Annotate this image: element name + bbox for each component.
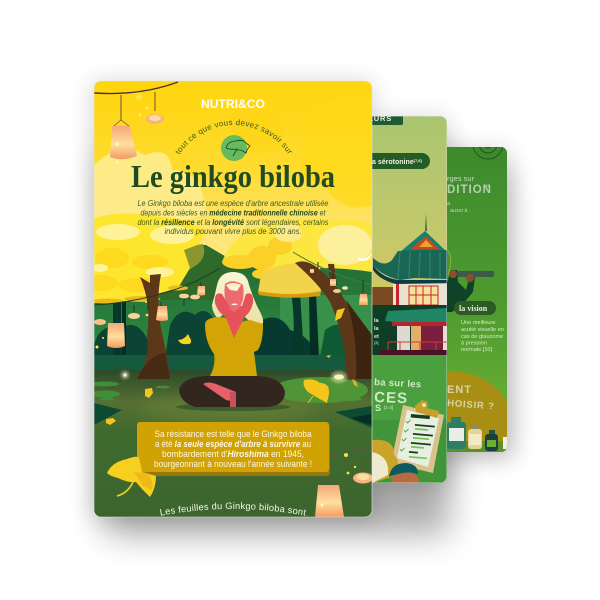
heading: charges sur l'audition: DITION [447,184,492,196]
hanging lamp string bottom right [330,447,372,455]
hands [215,293,229,318]
intro text [138,198,329,236]
pill: la sérotonine [372,153,430,169]
heading: biloba sur les: [1-3] [384,405,393,410]
heading: biloba sur les: S [375,403,381,413]
clipboard icon [391,400,444,473]
lower green section [372,355,447,488]
icon: large ginkgo leaf [107,457,156,497]
section: comment choisir [447,371,508,453]
vision text: Une meilleure [461,320,496,326]
heading: charges sur l'audition: [9] [486,184,490,188]
bottles [447,417,507,451]
card 3: vision panel [447,147,507,452]
pill: la sérotonine: [7,8] [414,158,423,163]
right foliage [222,219,372,298]
sky background [94,81,372,256]
telescope [447,250,494,312]
heading tab: EURS [368,114,392,123]
neck [224,306,244,338]
heading: charges sur l'audition: a [447,201,451,207]
heading: charges sur l'audition: aussi à : [450,208,471,214]
vision text: normale.[10] [461,347,493,353]
title: Le ginkgo biloba [131,158,335,194]
callout: Hiroshima: a été la seule espèce d'arbre à survivre au [155,439,311,449]
torso [205,317,263,376]
heading: biloba sur les: CES [374,389,408,407]
heading tab [372,116,403,125]
person at bottom [372,440,419,488]
callout: Hiroshima: bourgeonnant à nouveau l'année suivante ! [154,459,312,469]
back trunks [113,296,319,355]
right tree trunk [295,261,372,379]
pagoda: la [374,326,380,332]
card 2: neurotransmitters panel [372,116,447,483]
pill: la vision: la vision [459,304,488,313]
intro text: dont la résilience et la longévité sont légendaires, certains [138,217,329,227]
drop shadow [92,82,515,535]
vision text: acuité visuelle en [461,327,504,333]
string lights [94,252,372,320]
pill: la sérotonine: a sérotonine [372,159,414,166]
pagoda: la [374,318,380,324]
pill: la vision [454,301,496,315]
ground [90,355,372,517]
bottom curved text: Les feuilles du Ginkgo biloba sont [160,502,306,516]
section: comment choisir: ENT [447,384,472,396]
callout: Hiroshima [137,422,330,476]
intro text: depuis des siècles en médecine traditionnelle chinoise et [140,208,326,218]
arc subtitle: tout ce que vous devez savoir sur [176,119,292,154]
pagoda: [3] [374,340,378,345]
left tree trunk [137,274,170,379]
glowing lights [121,371,347,383]
heading: charges sur l'audition: rges sur [447,174,475,183]
callout: Hiroshima: Sa résistance est telle que le Ginkgo biloba [154,429,312,439]
hanging lanterns [94,269,368,348]
icon: ginkgo leaf badge [221,135,250,161]
decorative circles [472,147,503,160]
heading: charges sur l'audition [447,177,490,212]
soft clouds [94,135,372,220]
pagoda: et [374,334,379,340]
logo: NUTRI&CO [201,99,265,111]
woman meditating [176,272,290,411]
intro text: Le Ginkgo biloba est une espèce d'arbre ancestrale utilisée [138,198,329,208]
icon: bottom lantern [315,452,373,517]
vision text: à pression [461,340,487,346]
vision text: cas de glaucome [461,334,503,340]
pagoda [372,213,447,355]
section: comment choisir: HOISIR ? [447,398,495,412]
heading: biloba sur les [374,378,421,411]
hair [212,272,264,324]
top hanging lanterns [94,82,178,164]
callout: Hiroshima: bombardement d'Hiroshima en 1945, [162,449,304,459]
intro text: individus pouvant vivre plus de 3000 ans. [164,226,302,236]
heading: biloba sur les: ba sur les [374,377,422,390]
falling ginkgo leaves [106,308,358,425]
vision text [461,320,504,353]
card 1: main poster [94,81,372,517]
dark bushes [94,311,345,355]
left foliage [86,213,205,304]
background forest [94,244,372,360]
legs [179,376,285,407]
face [224,281,244,312]
